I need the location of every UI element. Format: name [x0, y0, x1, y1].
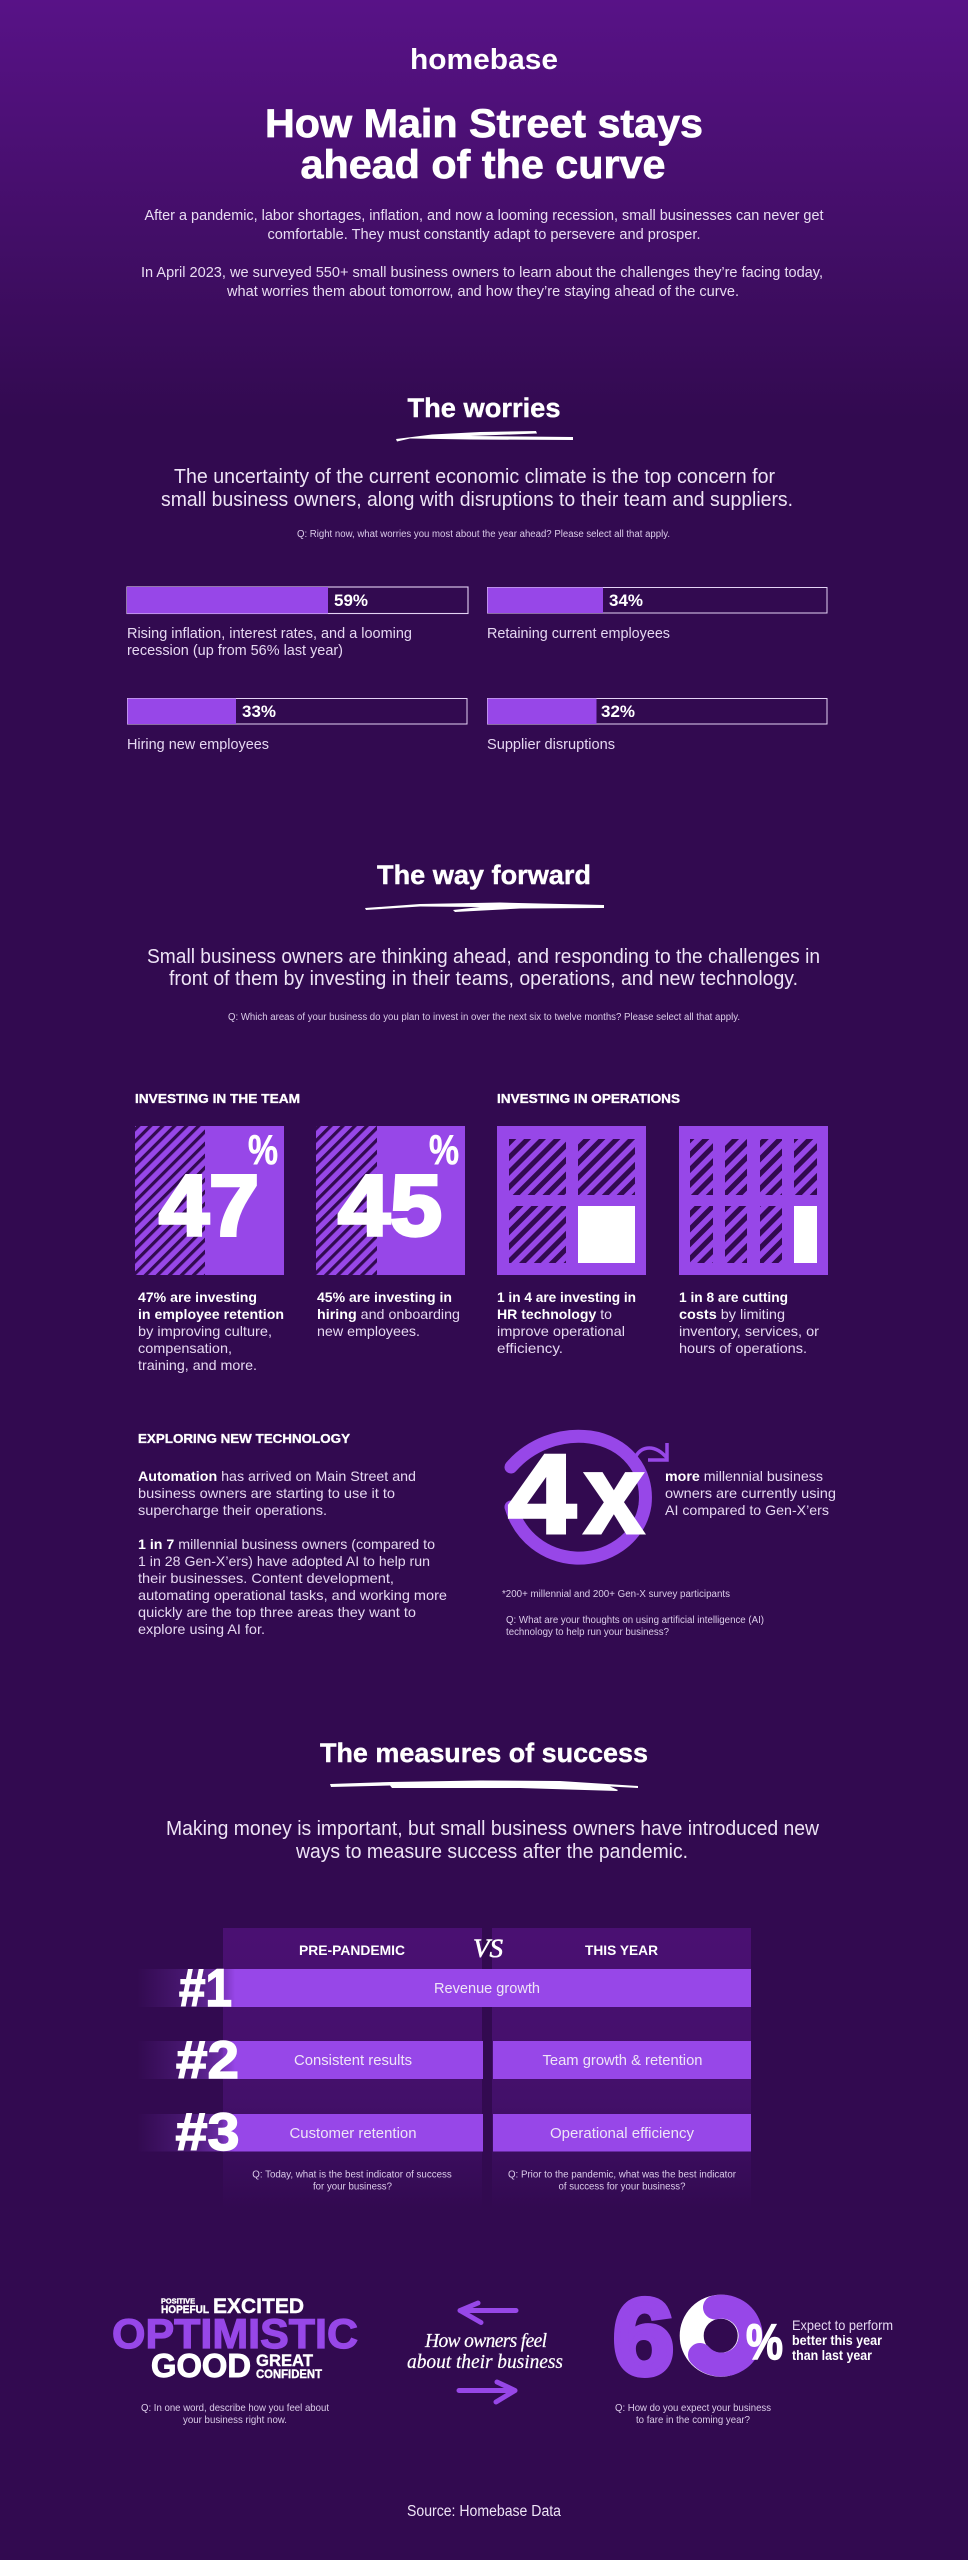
survey question: AI: Q: What are your thoughts on using artificial intelligence (AI) — [506, 1615, 764, 1626]
title: How Main Street stays — [265, 102, 703, 146]
survey question: today: Q: Today, what is the best indicator of success — [252, 2170, 452, 2180]
text: 4x more millennial owners: more millennial business — [665, 1468, 823, 1484]
row: #2 consistent results / team growth: #2 — [176, 2031, 239, 2090]
column: this year — [492, 1928, 751, 2210]
text: expect to perform better — [792, 2317, 893, 2363]
stat tile: 1 in 8 grid — [679, 1126, 828, 1275]
row: #1 revenue growth: #1 — [179, 1959, 232, 2018]
hand-drawn underline — [365, 902, 604, 912]
intro text: comfortable. They must constantly adapt to persevere and prosper. — [268, 227, 700, 243]
stat tile: 45%: % — [429, 1126, 459, 1173]
lead paragraph — [147, 946, 820, 990]
row: #2 consistent results / team growth — [137, 2031, 751, 2090]
lead paragraph: The uncertainty of the current economic climate is the top concern for — [174, 466, 775, 488]
icon: 4x in hand-drawn circle with arrow: x — [584, 1432, 644, 1557]
bar: 33% hiring: Hiring new employees — [127, 736, 269, 753]
section: the measures of success — [137, 1738, 820, 2210]
stat: 60% donut numeral: % — [746, 2314, 783, 2370]
text: 47% retention: 47% are investing — [138, 1289, 257, 1305]
bar: 32% supplier disruptions: 32% — [601, 702, 635, 721]
text: expect to perform better: Expect to perform — [792, 2317, 893, 2333]
text: 1 in 4 HR technology: efficiency. — [497, 1340, 563, 1356]
text: expect to perform better: than last year — [792, 2347, 872, 2363]
survey question: Q: Which areas of your business do you plan to invest in over the next six to twelve months? Please select all that apply. — [228, 1012, 740, 1023]
survey question: today — [252, 2170, 452, 2192]
bar: 33% hiring — [127, 698, 467, 753]
row: #3 customer retention / operational efficiency: Operational efficiency — [550, 2125, 694, 2142]
footnote: participants: *200+ millennial and 200+ Gen-X survey participants — [502, 1589, 730, 1600]
word cloud: how owners feel: EXCITED — [213, 2295, 304, 2318]
text: 45% hiring — [317, 1289, 460, 1339]
intro text: what worries them about tomorrow, and how they’re staying ahead of the curve. — [226, 284, 739, 300]
word cloud: how owners feel: GOOD — [151, 2347, 251, 2384]
stat tile: 45%: 45 — [338, 1158, 442, 1254]
subheading: investing in the team: INVESTING IN THE TEAM — [135, 1091, 300, 1106]
hand-drawn underline — [396, 431, 573, 442]
heading: the way forward: The way forward — [377, 860, 591, 890]
stat: 60% donut numeral — [613, 2276, 783, 2397]
word cloud: how owners feel: OPTIMISTIC — [112, 2310, 358, 2357]
word cloud: how owners feel: POSITIVE — [161, 2296, 195, 2306]
text: 47% retention — [138, 1289, 284, 1373]
text: automation paragraphs: supercharge their operations. — [138, 1502, 327, 1518]
survey question: prior — [508, 2170, 737, 2192]
text: 45% hiring: hiring and onboarding — [317, 1306, 460, 1322]
text: 1 in 8 cutting costs: 1 in 8 are cutting — [679, 1289, 788, 1305]
section: the way forward — [135, 860, 836, 1638]
script caption: about their business — [407, 2352, 563, 2373]
bar: 34% retaining employees: 34% — [609, 591, 643, 610]
survey question: one word — [141, 2402, 329, 2426]
text: automation paragraphs: 1 in 7 millennial business owners (compared to — [138, 1536, 435, 1552]
bar: 32% supplier disruptions: Supplier disruptions — [487, 736, 615, 753]
column: pre-pandemic — [223, 1928, 482, 2210]
bar: 34% retaining employees — [487, 588, 827, 642]
heading: the worries: The worries — [408, 393, 560, 423]
text: 4x more millennial owners: AI compared to Gen-X’ers — [665, 1502, 829, 1518]
text: 47% retention: compensation, — [138, 1340, 232, 1356]
text: 1 in 4 HR technology: 1 in 4 are investing in — [497, 1289, 636, 1305]
logo: homebase: homebase — [410, 44, 558, 76]
heading: the measures of success: The measures of success — [320, 1738, 648, 1768]
row: #3 customer retention / operational efficiency — [137, 2103, 751, 2162]
stat: 60% donut numeral: 6 — [613, 2276, 674, 2397]
bar: 59% rising inflation: 59% — [334, 591, 368, 610]
text: 1 in 8 cutting costs: inventory, services, or — [679, 1323, 819, 1339]
lead paragraph — [166, 1818, 820, 1863]
stat tile: 47%: % — [248, 1126, 278, 1173]
text: automation paragraphs: 1 in 28 Gen-X’ers) have adopted AI to help run — [138, 1553, 430, 1569]
vs mark: VS — [473, 1934, 503, 1963]
row: #3 customer retention / operational efficiency: #3 — [176, 2103, 240, 2162]
subheading: exploring new technology: EXPLORING NEW TECHNOLOGY — [138, 1431, 350, 1446]
hand-drawn underline — [330, 1780, 638, 1791]
bar: 34% retaining employees: Retaining current employees — [487, 625, 670, 642]
survey question: AI: technology to help run your business? — [506, 1627, 669, 1638]
column: this year: THIS YEAR — [585, 1942, 658, 1958]
survey question: coming year — [615, 2402, 771, 2426]
bar: 59% rising inflation — [127, 587, 468, 659]
survey question: prior: of success for your business? — [558, 2182, 686, 2192]
text: automation paragraphs: Automation has arrived on Main Street and — [138, 1468, 416, 1484]
stat tile: 1 in 4 grid — [497, 1126, 646, 1275]
text: automation paragraphs: business owners are starting to use it to — [138, 1485, 395, 1501]
stat tile: 47% — [135, 1126, 284, 1275]
row: #1 revenue growth: Revenue growth — [434, 1980, 540, 1997]
text: 4x more millennial owners — [665, 1468, 836, 1518]
stat tile: 47%: 47 — [159, 1158, 259, 1254]
lead paragraph: Small business owners are thinking ahead, and responding to the challenges in — [147, 946, 820, 968]
text: 1 in 8 cutting costs — [679, 1289, 819, 1356]
text: 47% retention: in employee retention — [138, 1306, 284, 1322]
survey question: one word: your business right now. — [183, 2414, 287, 2426]
text: automation paragraphs: automating operational tasks, and working more — [138, 1587, 447, 1603]
lead paragraph — [161, 466, 793, 511]
lead paragraph: small business owners, along with disruptions to their team and suppliers. — [161, 489, 793, 511]
survey question: coming year: Q: How do you expect your business — [615, 2402, 771, 2414]
arrow: pointing right — [459, 2382, 515, 2402]
icon: 4x in hand-drawn circle with arrow: 4 — [508, 1432, 576, 1557]
text: expect to perform better: better this year — [792, 2332, 882, 2348]
lead paragraph: front of them by investing in their teams, operations, and new technology. — [169, 968, 798, 990]
lead paragraph: ways to measure success after the pandemic. — [295, 1841, 688, 1863]
stat tile: 45% — [316, 1126, 465, 1275]
bar: 32% supplier disruptions — [487, 698, 827, 753]
icon: 4x in hand-drawn circle with arrow — [508, 1432, 667, 1558]
source line: Source: Homebase Data — [407, 2503, 561, 2520]
title — [265, 102, 703, 187]
survey question: AI — [506, 1615, 764, 1638]
bar: 59% rising inflation: recession (up from 56% last year) — [127, 642, 343, 659]
text: automation paragraphs: their businesses. Content development, — [138, 1570, 394, 1586]
title: ahead of the curve — [300, 143, 666, 187]
row: #1 revenue growth — [137, 1959, 751, 2018]
column: pre-pandemic: PRE-PANDEMIC — [299, 1942, 405, 1958]
comparison table — [137, 1928, 751, 2210]
text: 1 in 8 cutting costs: costs by limiting — [679, 1306, 785, 1322]
script caption — [407, 2331, 563, 2373]
text: 45% hiring: 45% are investing in — [317, 1289, 452, 1305]
section: the worries — [127, 393, 827, 753]
survey question: coming year: to fare in the coming year? — [636, 2414, 750, 2426]
survey question: Q: Right now, what worries you most about the year ahead? Please select all that apply. — [297, 529, 670, 540]
text: 47% retention: by improving culture, — [138, 1323, 272, 1339]
script caption: How owners feel — [424, 2331, 547, 2352]
row: #2 consistent results / team growth: Team growth & retention — [542, 2052, 702, 2069]
survey question: today: for your business? — [313, 2182, 392, 2192]
text: automation paragraphs — [138, 1468, 447, 1637]
survey question: prior: Q: Prior to the pandemic, what was the best indicator — [508, 2170, 737, 2180]
word cloud: how owners feel — [112, 2295, 358, 2384]
text: 45% hiring: new employees. — [317, 1323, 420, 1339]
bar: 33% hiring: 33% — [242, 702, 276, 721]
word cloud: how owners feel: HOPEFUL — [161, 2304, 209, 2316]
survey question: one word: Q: In one word, describe how you feel about — [141, 2402, 329, 2414]
arrow: pointing left — [460, 2303, 516, 2322]
text: automation paragraphs: quickly are the top three areas they want to — [138, 1604, 416, 1620]
text: 1 in 8 cutting costs: hours of operations. — [679, 1340, 807, 1356]
text: 1 in 4 HR technology: improve operational — [497, 1323, 625, 1339]
word cloud: how owners feel: CONFIDENT — [256, 2367, 323, 2381]
row: #2 consistent results / team growth: Consistent results — [294, 2052, 412, 2069]
intro text: In April 2023, we surveyed 550+ small business owners to learn about the challenges they’re facing today, — [141, 265, 823, 281]
bar: 59% rising inflation: Rising inflation, interest rates, and a looming — [127, 625, 412, 642]
text: automation paragraphs: explore using AI for. — [138, 1621, 265, 1637]
word cloud: how owners feel: GREAT — [256, 2351, 314, 2370]
text: 1 in 4 HR technology — [497, 1289, 636, 1356]
text: 4x more millennial owners: owners are currently using — [665, 1485, 836, 1501]
text: 47% retention: training, and more. — [138, 1357, 257, 1373]
subheading: investing in operations: INVESTING IN OPERATIONS — [497, 1091, 680, 1106]
text: 1 in 4 HR technology: HR technology to — [497, 1306, 612, 1322]
row: #3 customer retention / operational efficiency: Customer retention — [290, 2125, 416, 2142]
intro text: After a pandemic, labor shortages, inflation, and now a looming recession, small businesses can never get — [144, 208, 824, 224]
intro text — [141, 208, 824, 300]
lead paragraph: Making money is important, but small business owners have introduced new — [166, 1818, 820, 1840]
